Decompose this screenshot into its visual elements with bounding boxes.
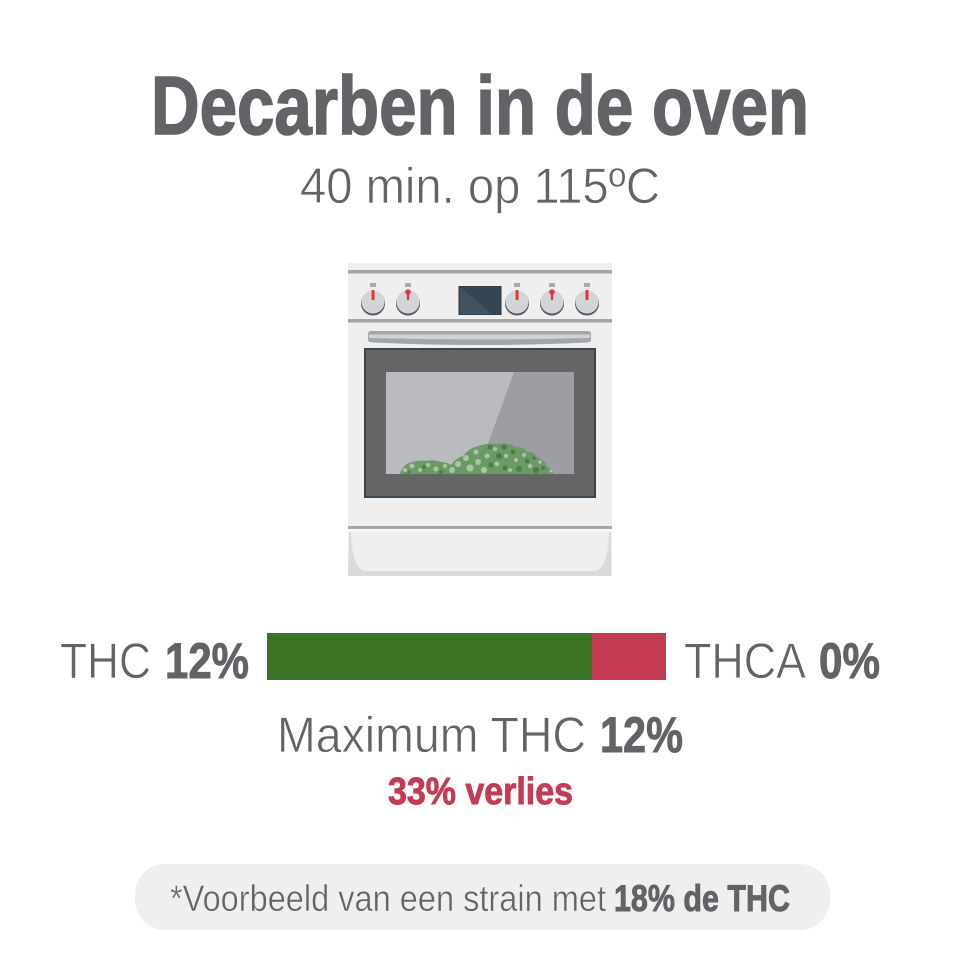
oven handle: [368, 331, 591, 345]
oven display: [458, 286, 502, 315]
subtitle: 40 min. op 115ºC: [300, 158, 660, 214]
footnote pill: 18% de THC: [614, 878, 790, 919]
THC label: THC: [60, 633, 151, 689]
oven door window: [365, 349, 595, 497]
THCA value: 0%: [819, 633, 880, 689]
cannabis in oven: [400, 443, 553, 474]
maximum THC label: Maximum THC: [277, 707, 586, 763]
THC value: 12%: [165, 633, 249, 689]
icon: oven: [348, 263, 612, 576]
title: Decarben in de oven: [151, 59, 809, 152]
oven drawer: [348, 532, 611, 576]
loss: 33% verlies: [388, 771, 573, 813]
bar: THC versus THCA: [267, 633, 666, 680]
THCA label: THCA: [684, 633, 807, 689]
oven knobs: [361, 283, 599, 316]
footnote pill: [135, 864, 830, 930]
footnote pill: *Voorbeeld van een strain met: [170, 878, 607, 919]
maximum THC value: 12%: [600, 707, 683, 763]
